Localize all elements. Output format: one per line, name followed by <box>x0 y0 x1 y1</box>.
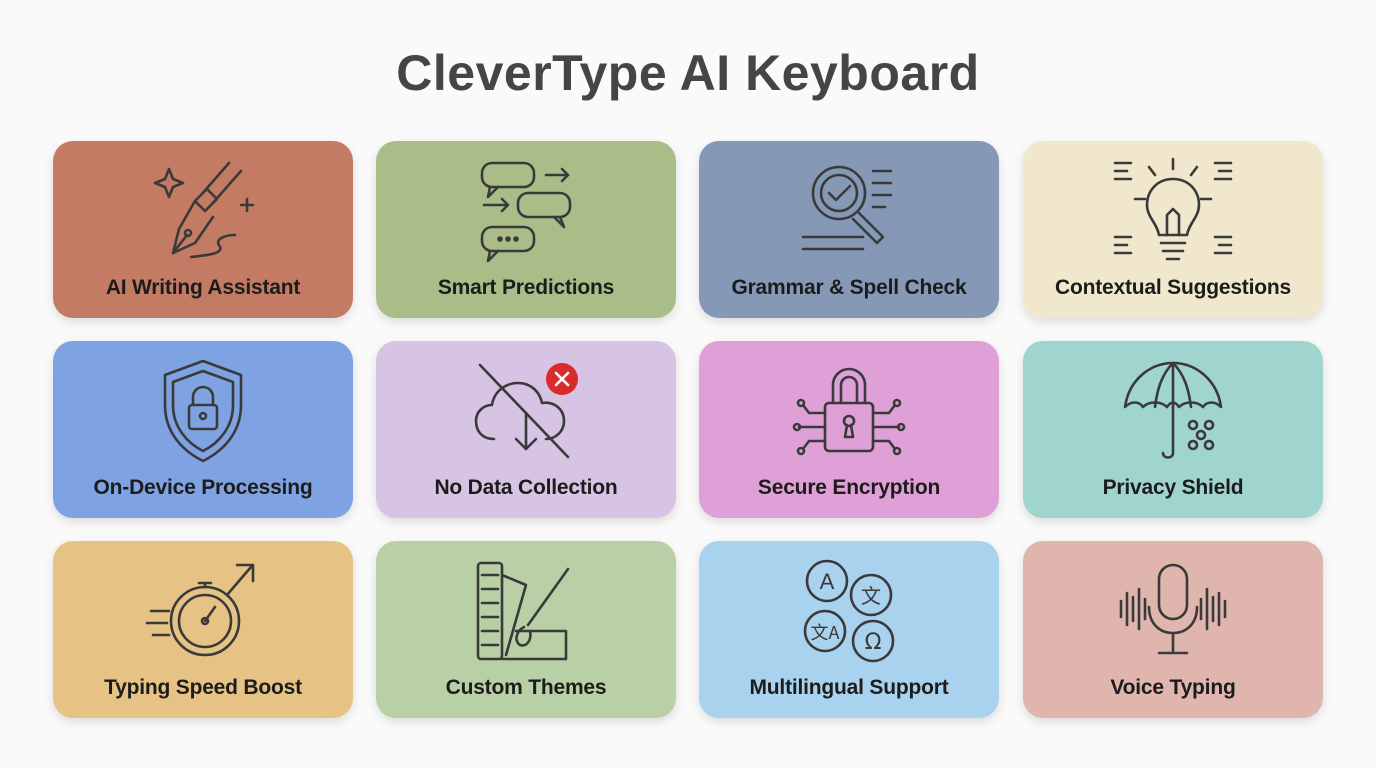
label: AI Writing Assistant <box>106 276 300 299</box>
title: CleverType AI Keyboard <box>396 45 980 101</box>
panel: No Data Collection <box>376 341 676 518</box>
icon: umbrella <box>1124 362 1222 459</box>
icon: crossed cloud <box>474 363 578 458</box>
icon: language bubbles: A <box>820 569 835 594</box>
panel: Secure Encryption <box>699 341 999 518</box>
label: Contextual Suggestions <box>1055 276 1291 299</box>
panel: Grammar & Spell Check <box>699 141 999 318</box>
icon: padlock circuit <box>792 368 906 456</box>
panel: Voice Typing <box>1023 541 1323 718</box>
icon: language bubbles <box>804 560 894 662</box>
label: Voice Typing <box>1110 676 1236 699</box>
label: Grammar & Spell Check <box>731 276 967 299</box>
label: On-Device Processing <box>94 476 312 499</box>
icon: stopwatch <box>146 564 254 656</box>
panel: AI Writing Assistant <box>53 141 353 318</box>
panel: On-Device Processing <box>53 341 353 518</box>
icon: chat bubbles <box>480 162 572 262</box>
icon: microphone <box>1120 564 1226 654</box>
panel: Typing Speed Boost <box>53 541 353 718</box>
label: No Data Collection <box>434 476 618 499</box>
panel: Custom Themes <box>376 541 676 718</box>
panel: Smart Predictions <box>376 141 676 318</box>
label: Typing Speed Boost <box>104 676 302 699</box>
panel: Multilingual Support <box>699 541 999 718</box>
label: Privacy Shield <box>1103 476 1243 499</box>
icon: pen nib <box>154 162 254 258</box>
icon: magnifier check <box>802 166 892 250</box>
icon: language bubbles: Ω <box>865 630 881 655</box>
icon: swatches brush <box>476 562 570 660</box>
label: Multilingual Support <box>750 676 948 699</box>
label: Custom Themes <box>446 676 606 699</box>
icon: language bubbles: 文A <box>811 619 840 645</box>
icon: light bulb <box>1114 158 1232 260</box>
icon: language bubbles: 文 <box>861 580 881 609</box>
panel: Contextual Suggestions <box>1023 141 1323 318</box>
panel: Privacy Shield <box>1023 341 1323 518</box>
icon: shield lock <box>164 360 242 462</box>
label: Secure Encryption <box>758 476 940 499</box>
label: Smart Predictions <box>438 276 614 299</box>
